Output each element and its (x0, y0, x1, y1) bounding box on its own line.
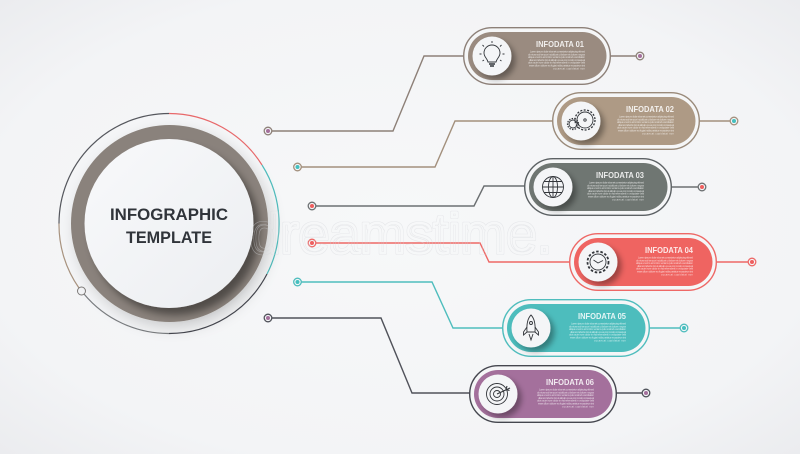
body text (569, 322, 626, 342)
dark ring (71, 125, 268, 322)
body text: ullamco laboris nisi ut aliquip ex ea commodo consequat (570, 330, 626, 334)
heading: INFODATA 05 (578, 311, 626, 321)
icon: gears (568, 110, 595, 130)
icon: rocket (524, 315, 538, 340)
body text: esse cillum dolore eu fugiat nulla pariatur excepteur sint (588, 194, 644, 198)
heading: INFODATA 04 (645, 245, 693, 255)
heading: INFODATA 06 (546, 377, 594, 387)
connector 3 (308, 183, 706, 210)
connector 5 (294, 278, 688, 332)
heading: INFODATA 01 (536, 39, 584, 49)
body text: ullamco laboris nisi ut aliquip ex ea commodo consequat (529, 58, 585, 62)
body text: Lorem ipsum dolor sit amet consectetur adipiscing elit sed (589, 180, 644, 184)
body text: do eiusmod tempor incididunt ut labore et dolore magna (569, 324, 626, 328)
body text: occaecat cupidatat non (661, 272, 694, 276)
connector 1 (264, 52, 644, 135)
body text: aliqua ut enim ad minim veniam quis nostrud exercitation (569, 327, 626, 331)
white disc with title (84, 139, 254, 308)
body text: duis aute irure dolor in reprehenderit in voluptate velit (636, 267, 693, 271)
body text (537, 388, 594, 408)
icon: clock gear (588, 252, 608, 272)
body text: Lorem ipsum dolor sit amet consectetur adipiscing elit sed (619, 114, 674, 118)
body text: do eiusmod tempor incididunt ut labore et dolore magna (617, 117, 674, 121)
panel: infodata 02 (553, 93, 699, 149)
body text: aliqua ut enim ad minim veniam quis nostrud exercitation (617, 120, 674, 124)
panel: infodata 04 (570, 234, 716, 290)
icon: globe (542, 176, 564, 198)
body text: esse cillum dolore eu fugiat nulla pariatur excepteur sint (570, 336, 626, 340)
body text: occaecat cupidatat non (553, 66, 586, 70)
heading: INFODATA 02 (626, 104, 674, 114)
body text: ullamco laboris nisi ut aliquip ex ea commodo consequat (538, 396, 594, 400)
body text: aliqua ut enim ad minim veniam quis nostrud exercitation (636, 261, 694, 265)
panel: infodata 05 (503, 300, 649, 356)
outer arc ring (59, 114, 279, 334)
arc marker (78, 287, 86, 295)
body text: esse cillum dolore eu fugiat nulla pariatur excepteur sint (529, 64, 585, 68)
watermark: dreamstime. (250, 202, 552, 265)
connector 4 (308, 239, 756, 266)
body text (528, 50, 586, 70)
body text: Lorem ipsum dolor sit amet consectetur adipiscing elit sed (638, 256, 694, 260)
body text: esse cillum dolore eu fugiat nulla pariatur excepteur sint (618, 128, 674, 132)
panel: infodata 03 (525, 159, 671, 215)
heading: INFODATA 03 (596, 170, 644, 180)
panel: central hub (59, 114, 279, 334)
body text: do eiusmod tempor incididunt ut labore et dolore magna (587, 183, 644, 187)
body text: occaecat cupidatat non (612, 197, 644, 201)
panel: infodata 01 (464, 28, 610, 84)
body text: esse cillum dolore eu fugiat nulla pariatur excepteur sint (637, 270, 693, 274)
panel: infodata 06 (470, 366, 616, 422)
body text: duis aute irure dolor in reprehenderit in voluptate velit (528, 61, 585, 65)
connector 2 (294, 117, 738, 171)
body text: Lorem ipsum dolor sit amet consectetur adipiscing elit sed (530, 50, 586, 54)
body text: duis aute irure dolor in reprehenderit in voluptate velit (587, 192, 644, 196)
body text: esse cillum dolore eu fugiat nulla pariatur excepteur sint (538, 402, 594, 406)
body text: occaecat cupidatat non (642, 131, 674, 135)
body text: occaecat cupidatat non (562, 404, 594, 408)
body text (636, 256, 694, 276)
body text: do eiusmod tempor incididunt ut labore et dolore magna (537, 390, 594, 394)
icon: light bulb (480, 41, 504, 66)
body text: occaecat cupidatat non (594, 338, 626, 342)
body text: aliqua ut enim ad minim veniam quis nostrud exercitation (537, 393, 594, 397)
body text: aliqua ut enim ad minim veniam quis nostrud exercitation (528, 55, 586, 59)
body text: duis aute irure dolor in reprehenderit in voluptate velit (569, 333, 626, 337)
body text: do eiusmod tempor incididunt ut labore et dolore magna (636, 258, 694, 262)
body text: duis aute irure dolor in reprehenderit in voluptate velit (537, 399, 594, 403)
white disc with title: TEMPLATE (126, 228, 212, 247)
body text (587, 180, 644, 201)
body text: ullamco laboris nisi ut aliquip ex ea commodo consequat (588, 189, 644, 193)
connector 6 (264, 314, 650, 397)
body text: do eiusmod tempor incididunt ut labore et dolore magna (528, 52, 586, 56)
body text: duis aute irure dolor in reprehenderit in voluptate velit (617, 126, 674, 130)
body text: aliqua ut enim ad minim veniam quis nostrud exercitation (587, 186, 644, 190)
body text: Lorem ipsum dolor sit amet consectetur adipiscing elit sed (571, 322, 626, 326)
body text (617, 114, 674, 135)
body text: ullamco laboris nisi ut aliquip ex ea commodo consequat (637, 264, 693, 268)
icon: target (486, 384, 510, 404)
white disc with title: INFOGRAPHIC (110, 205, 228, 224)
body text: Lorem ipsum dolor sit amet consectetur adipiscing elit sed (539, 388, 594, 392)
body text: ullamco laboris nisi ut aliquip ex ea commodo consequat (618, 123, 674, 127)
